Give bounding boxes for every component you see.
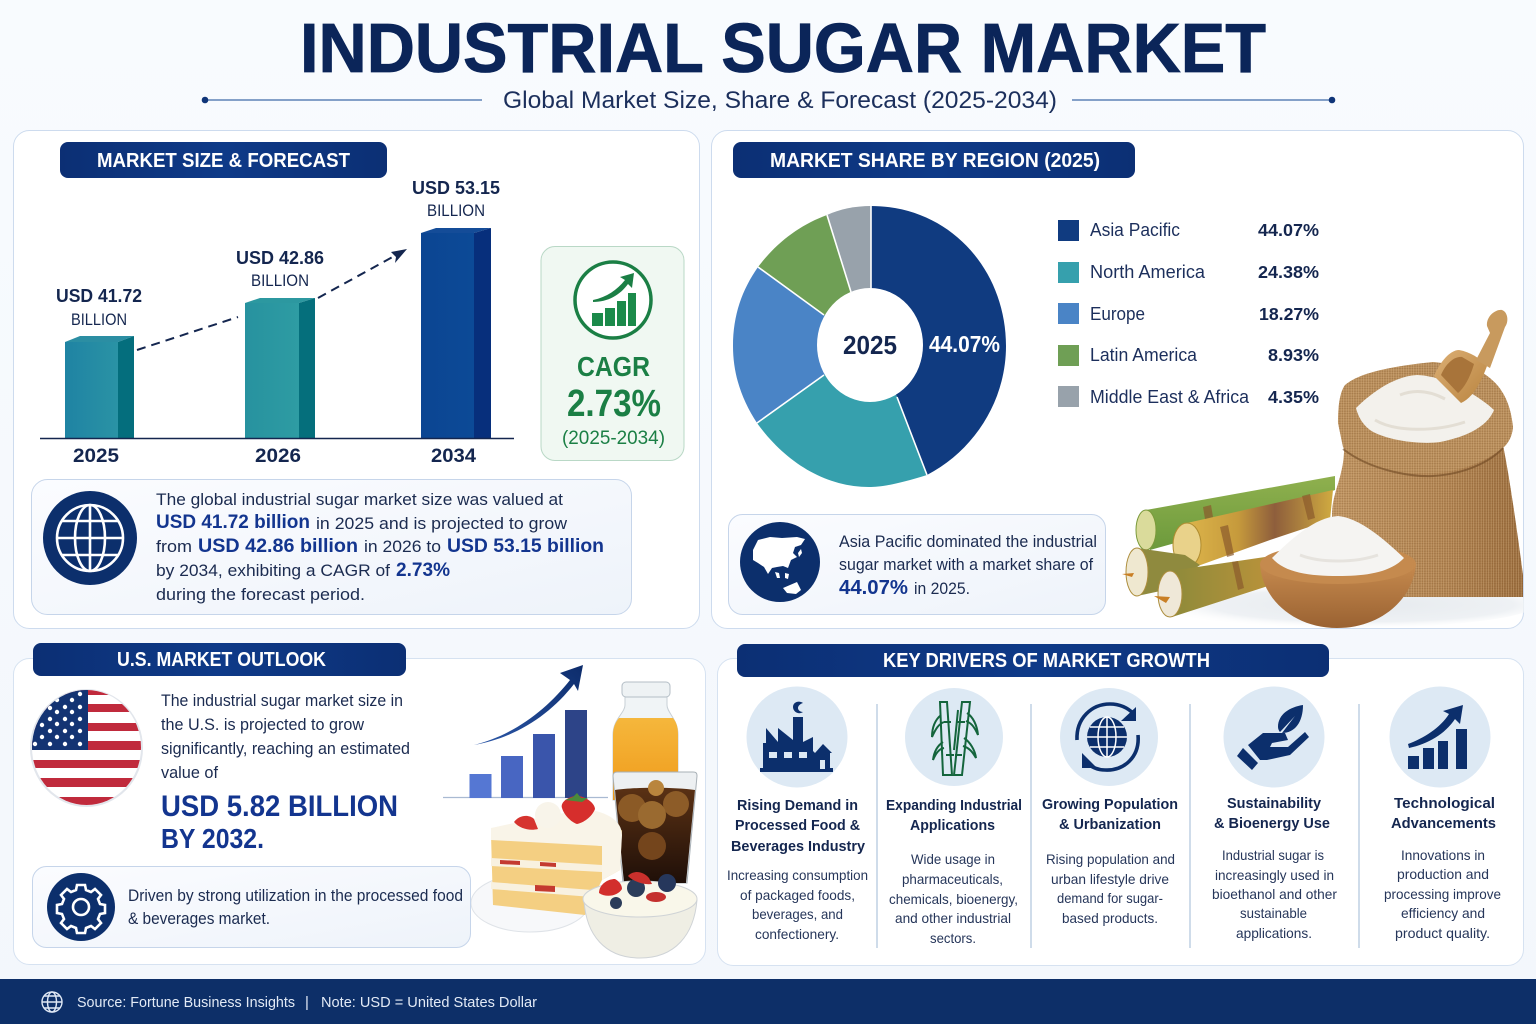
- text block: driven by: Driven by strong utilization in the processed food: [128, 886, 463, 905]
- legend: North America: [1090, 262, 1206, 282]
- bowl: [1260, 564, 1416, 628]
- legend: Middle East & Africa: [1090, 387, 1250, 407]
- panel: key drivers: [718, 644, 1524, 966]
- heading: market size and forecast: [60, 142, 387, 178]
- driver: population and urbanization: demand for sugar-: [1057, 890, 1163, 906]
- icon: rotating globe: [1077, 704, 1138, 770]
- driver: rising demand: Rising Demand in: [737, 797, 858, 814]
- driver: sustainability: Sustainability: [1227, 795, 1322, 812]
- driver: population and urbanization: urban lifestyle drive: [1051, 871, 1169, 887]
- driver: sustainability: increasingly used in: [1215, 867, 1334, 883]
- legend: 24.38%: [1258, 262, 1319, 282]
- bar chart: market size: USD 53.15: [412, 177, 500, 198]
- driver: technological advancements: efficiency and: [1401, 905, 1485, 921]
- legend: 44.07%: [1258, 220, 1319, 240]
- donut chart: regional share: 2025: [843, 330, 897, 360]
- heading: key drivers: [737, 644, 1329, 677]
- subtitle with rules: [202, 87, 1335, 114]
- heading: U.S. outlook: [33, 643, 406, 676]
- bar chart: market size: BILLION: [71, 310, 127, 329]
- cane stalks: [1146, 476, 1335, 550]
- footer: |: [305, 994, 309, 1011]
- legend: Asia Pacific: [1090, 220, 1180, 240]
- driver: technological advancements: [1384, 686, 1501, 941]
- text block: market summary: in 2025 and is projected to grow: [316, 514, 568, 533]
- driver: rising demand: [727, 686, 868, 942]
- bar chart: market size: BILLION: [251, 271, 309, 290]
- driver: population and urbanization: based products.: [1062, 910, 1158, 926]
- text block: market summary: during the forecast period.: [156, 585, 365, 604]
- driver: sustainability: [1212, 686, 1337, 941]
- icon: globe: [43, 491, 137, 585]
- footer: [0, 979, 1536, 1024]
- callout: CAGR: [541, 246, 684, 460]
- legend: 18.27%: [1259, 304, 1319, 324]
- driver: expanding applications: Applications: [910, 817, 995, 834]
- bar chart: market size: 2026: [255, 446, 301, 467]
- text block: U.S. outlook: The industrial sugar market size in: [161, 691, 403, 710]
- text block: Asia Pacific: 44.07%: [839, 577, 908, 599]
- driver: technological advancements: Advancements: [1391, 815, 1496, 832]
- driver: expanding applications: Expanding Industrial: [886, 797, 1022, 814]
- text block: market summary: USD 41.72 billion: [156, 512, 310, 533]
- panel: U.S. market outlook: [14, 643, 706, 964]
- icon: CAGR growth: [575, 262, 651, 338]
- driver: rising demand: confectionery.: [755, 926, 839, 942]
- text block: market summary: The global industrial sugar market size was valued at: [156, 490, 563, 509]
- text block: market summary: in 2026 to: [364, 537, 441, 556]
- heading: U.S. outlook: U.S. MARKET OUTLOOK: [117, 649, 326, 671]
- bar chart: market size: BILLION: [427, 201, 485, 220]
- bar chart: market size: 2025: [73, 446, 119, 467]
- driver: sustainability: bioethanol and other: [1212, 886, 1337, 902]
- text block: Asia Pacific: [728, 514, 1106, 614]
- glass of cola: [613, 772, 697, 883]
- driver: rising demand: beverages, and: [752, 906, 843, 922]
- sugar in sack: [1356, 375, 1494, 443]
- driver: technological advancements: product quality.: [1395, 925, 1490, 941]
- heading: market share: [733, 142, 1135, 178]
- driver: rising demand: Processed Food &: [735, 817, 860, 834]
- icon: factory: [760, 702, 833, 772]
- driver: rising demand: Beverages Industry: [731, 838, 866, 855]
- driver: technological advancements: Innovations in: [1401, 847, 1485, 863]
- footer: Source: Fortune Business Insights: [77, 994, 295, 1011]
- text block: U.S. outlook: BY 2032.: [161, 823, 264, 854]
- bar chart: market size: USD 42.86: [236, 247, 324, 268]
- icon: Asia map: [740, 522, 820, 602]
- legend: 8.93%: [1268, 345, 1319, 365]
- text block: market summary: by 2034, exhibiting a CAGR of: [156, 561, 390, 580]
- panel: market size and forecast: [14, 130, 700, 628]
- driver: sustainability: sustainable: [1240, 905, 1307, 921]
- bar chart: market size: 2034: [431, 446, 476, 467]
- footer: Note: USD = United States Dollar: [321, 994, 537, 1011]
- text block: U.S. outlook: significantly, reaching an estimated: [161, 739, 410, 758]
- bar chart: market size: [40, 177, 514, 467]
- heading: key drivers: KEY DRIVERS OF MARKET GROWTH: [883, 650, 1210, 672]
- driver: expanding applications: [886, 688, 1022, 946]
- arrow: growth trend: [137, 249, 407, 350]
- text block: market summary: [32, 480, 632, 614]
- driver: technological advancements: production and: [1397, 866, 1489, 882]
- icon: gear: [47, 873, 115, 941]
- driver: sustainability: applications.: [1236, 925, 1312, 941]
- driver: sustainability: Industrial sugar is: [1222, 847, 1324, 863]
- icon: growth chart: [1408, 705, 1467, 769]
- driver: rising demand: of packaged foods,: [740, 887, 855, 903]
- yogurt bowl with berries: [584, 900, 697, 958]
- heading: market size and forecast: MARKET SIZE & FORECAST: [97, 150, 350, 172]
- heading: market share: MARKET SHARE BY REGION (2025): [770, 150, 1100, 172]
- text block: driven by: [32, 866, 470, 948]
- donut chart: regional share: 44.07%: [929, 331, 1000, 357]
- text block: U.S. outlook: USD 5.82 BILLION: [161, 790, 398, 823]
- cake slice: [491, 830, 622, 915]
- icon: U.S. flag: [30, 688, 145, 808]
- illustration: sugar sack, cane and bowl: [1105, 310, 1535, 629]
- icon: hand and leaf: [1237, 705, 1309, 770]
- donut chart: regional share: [733, 206, 1006, 487]
- driver: expanding applications: Wide usage in: [911, 851, 995, 867]
- driver: population and urbanization: Growing Population: [1042, 796, 1178, 813]
- text block: market summary: USD 53.15 billion: [447, 536, 604, 557]
- driver: population and urbanization: [1042, 688, 1178, 926]
- text block: U.S. outlook: the U.S. is projected to grow: [161, 715, 365, 734]
- icon: sugar cane: [932, 702, 978, 775]
- driver: sustainability: & Bioenergy Use: [1214, 815, 1330, 832]
- chart: rising bars with arrow: [443, 665, 608, 798]
- panel: market share by region: [712, 130, 1535, 629]
- text block: market summary: 2.73%: [396, 560, 450, 581]
- text block: U.S. outlook: [161, 691, 410, 854]
- callout: CAGR: (2025-2034): [562, 428, 665, 449]
- bar chart: market size: USD 41.72: [56, 285, 142, 306]
- scoop: [1434, 350, 1487, 403]
- text block: market summary: USD 42.86 billion: [198, 536, 358, 557]
- text block: driven by: & beverages market.: [128, 909, 270, 928]
- legend: 4.35%: [1268, 387, 1319, 407]
- text block: Asia Pacific: in 2025.: [914, 580, 970, 598]
- sack body: [1332, 440, 1523, 597]
- legend: [1058, 220, 1319, 407]
- icon: footer globe: [42, 992, 62, 1012]
- text block: market summary: from: [156, 537, 192, 556]
- strawberries and cream: [562, 796, 595, 824]
- driver: population and urbanization: & Urbanization: [1059, 816, 1161, 833]
- text block: U.S. outlook: value of: [161, 763, 218, 782]
- driver: expanding applications: chemicals, bioenergy,: [889, 891, 1018, 907]
- driver: rising demand: Increasing consumption: [727, 867, 868, 883]
- driver: expanding applications: and other industrial: [895, 910, 1011, 926]
- illustration: food and beverages: [471, 682, 697, 958]
- text block: Asia Pacific: Asia Pacific dominated the industrial: [839, 533, 1097, 551]
- legend: Europe: [1090, 304, 1145, 324]
- legend: Latin America: [1090, 345, 1198, 365]
- driver: expanding applications: pharmaceuticals,: [902, 871, 1003, 887]
- driver: technological advancements: processing improve: [1384, 886, 1501, 902]
- driver: population and urbanization: Rising population and: [1046, 851, 1175, 867]
- driver: technological advancements: Technological: [1394, 795, 1495, 812]
- title: INDUSTRIAL SUGAR MARKET: [300, 9, 1266, 87]
- callout: CAGR: 2.73%: [567, 383, 661, 425]
- plate: [471, 874, 589, 932]
- callout: CAGR: CAGR: [577, 351, 650, 382]
- subtitle with rules: Global Market Size, Share & Forecast (2025-2034): [503, 87, 1057, 114]
- driver: expanding applications: sectors.: [930, 930, 976, 946]
- sack rim: [1338, 362, 1513, 473]
- text block: Asia Pacific: sugar market with a market share of: [839, 556, 1093, 574]
- bottle: [613, 697, 678, 800]
